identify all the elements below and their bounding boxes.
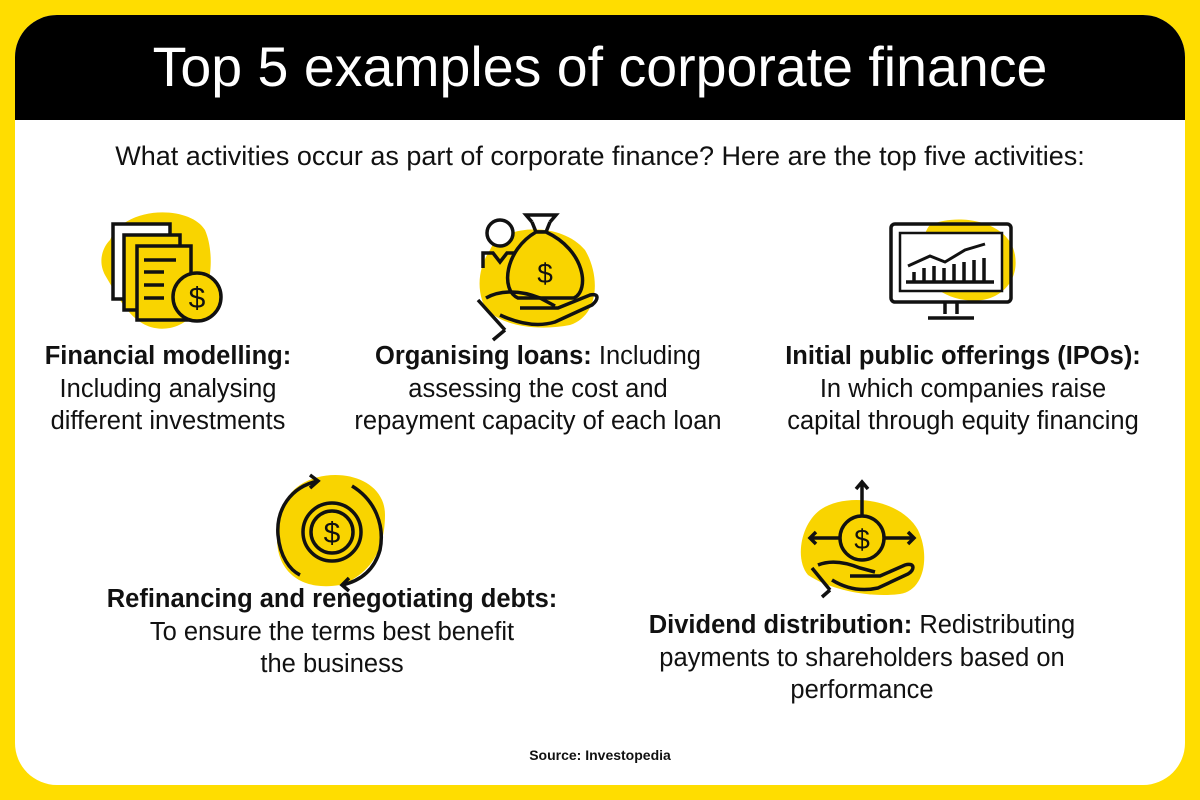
text: financial modelling: different investments xyxy=(51,407,285,435)
title: Top 5 examples of corporate finance xyxy=(153,36,1047,98)
text: dividend distribution: payments to shareholders based on xyxy=(659,644,1065,672)
text: dividend distribution: performance xyxy=(790,676,934,704)
text: financial modelling xyxy=(45,342,291,435)
text: dividend distribution: Dividend distribution: Redistributing xyxy=(649,611,1075,639)
text: organising loans: Organising loans: Including xyxy=(375,342,701,370)
text: IPOs: Initial public offerings (IPOs): xyxy=(785,342,1141,370)
text: refinancing xyxy=(107,585,557,678)
icon: refinancing coin with arrows: $ xyxy=(324,517,341,550)
text: refinancing: the business xyxy=(260,650,404,678)
text: dividend distribution xyxy=(649,611,1075,704)
text: IPOs xyxy=(785,342,1141,435)
icon: documents with dollar: $ xyxy=(189,282,206,315)
title xyxy=(15,15,1185,120)
text: organising loans: repayment capacity of each loan xyxy=(354,407,722,435)
text: organising loans xyxy=(354,342,722,435)
source: Source: Investopedia xyxy=(529,747,671,763)
text: IPOs: capital through equity financing xyxy=(787,407,1139,435)
text: refinancing: To ensure the terms best benefit xyxy=(150,618,514,646)
text: financial modelling: Financial modelling: xyxy=(45,342,291,370)
text: refinancing: Refinancing and renegotiating debts: xyxy=(107,585,557,613)
icon: person with money bag in hand: $ xyxy=(537,258,553,289)
text: IPOs: In which companies raise xyxy=(820,374,1106,402)
icon: dividend coin with arrows and hand: $ xyxy=(854,524,870,555)
text: financial modelling: Including analysing xyxy=(60,374,276,402)
subtitle: What activities occur as part of corporate finance? Here are the top five activities: xyxy=(115,141,1085,171)
text: organising loans: assessing the cost and xyxy=(408,374,668,402)
